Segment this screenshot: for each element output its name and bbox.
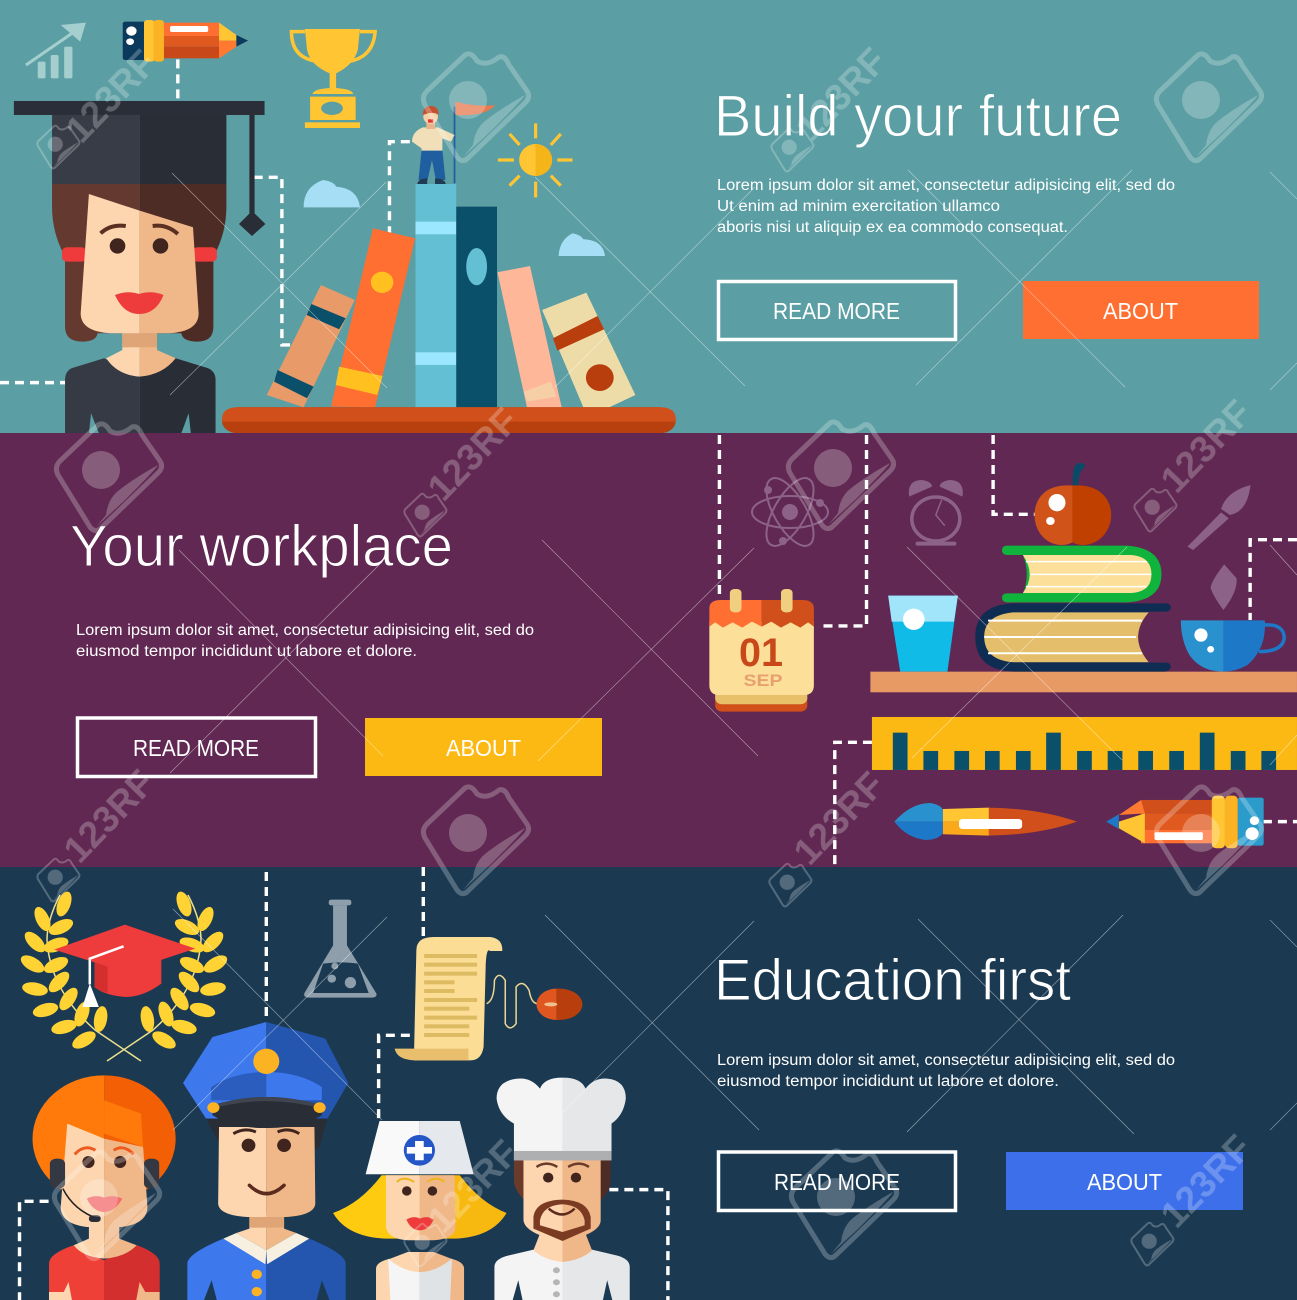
button: read more (718, 1152, 956, 1210)
icon: graduation cap red (54, 925, 195, 1007)
watermark overlay: 123RF (786, 764, 892, 873)
button: about: ABOUT (1087, 1169, 1162, 1195)
icon: green book (1002, 546, 1161, 602)
body text: Lorem ipsum dolor sit amet, consectetur adipisicing elit, sed do (717, 177, 1175, 194)
icon: laurel wreath (18, 890, 230, 1061)
heading: Your workplace (70, 514, 453, 579)
icon: navy book (975, 603, 1171, 672)
icon: trophy (291, 29, 375, 128)
watermark overlay: 123RF (788, 40, 894, 149)
calendar date: 01 (739, 631, 783, 675)
body text: aboris nisi ut aliquip ex ea commodo consequat. (717, 219, 1068, 236)
body text: eiusmod tempor incididunt ut labore et dolore. (717, 1073, 1059, 1090)
icon: glass of water (888, 596, 958, 672)
icon: growth chart (26, 23, 86, 78)
icon: cloud small (559, 233, 605, 256)
watermark overlay: 123RF (420, 400, 526, 509)
panel background teal (0, 0, 1297, 433)
body text (76, 622, 534, 660)
shelf (870, 672, 1297, 692)
figure: chef (494, 1078, 630, 1300)
watermark overlay: 123RF (56, 762, 162, 871)
watermark overlay: 123RF (420, 1132, 526, 1241)
body text (717, 177, 1175, 236)
icon: flask (304, 900, 377, 998)
figure: small man with flag (412, 102, 495, 184)
icon: scroll (395, 937, 502, 1060)
illustration: school supplies (709, 435, 1297, 867)
icon: sun (498, 123, 572, 197)
icon: paint brush (1187, 485, 1251, 550)
shelf books (222, 184, 676, 433)
watermark overlay: 123RF (1153, 392, 1259, 501)
icon: tea cup (1181, 620, 1284, 672)
panel: your workplace (0, 433, 1297, 867)
button: read more (718, 282, 956, 340)
panel: education first (0, 867, 1297, 1300)
illustration: graduate and books (0, 20, 676, 433)
icon: pencil (123, 20, 248, 62)
body text (717, 1052, 1175, 1090)
button: about (365, 718, 602, 776)
icon: atom (752, 471, 828, 553)
button: read more (78, 718, 316, 776)
panel: build your future (0, 0, 1297, 433)
icon: alarm clock (909, 480, 963, 546)
button: read more: READ MORE (133, 735, 259, 761)
illustration: professions (20, 867, 668, 1300)
figure: graduate woman (14, 101, 265, 433)
icon: pencil colored (1106, 796, 1264, 848)
button: about: ABOUT (1103, 298, 1178, 324)
heading: Education first (714, 948, 1071, 1013)
icon: ruler (872, 717, 1297, 770)
icon: calendar (709, 589, 814, 712)
icon: cloud (304, 180, 360, 207)
watermark overlay: 123RF (58, 42, 164, 151)
button: read more: READ MORE (774, 1169, 900, 1195)
icon: paint brush colored (894, 803, 1077, 840)
body text: Ut enim ad minim exercitation ullamco (717, 198, 1000, 215)
button: read more: READ MORE (773, 298, 900, 324)
figure: nurse (333, 1121, 507, 1300)
button: about (1023, 281, 1259, 339)
figure: call center operator (33, 1075, 176, 1300)
calendar date: SEP (744, 671, 782, 690)
button: about: ABOUT (446, 735, 521, 761)
panel background purple (0, 433, 1297, 867)
figure: police officer (183, 1022, 348, 1300)
icon: apple (1035, 463, 1111, 545)
panel background navy (0, 867, 1297, 1300)
icon: steam leaf (1211, 564, 1237, 610)
heading: Build your future (714, 84, 1122, 149)
icon: computer mouse (487, 975, 582, 1028)
body text: eiusmod tempor incididunt ut labore et dolore. (76, 643, 417, 660)
body text: Lorem ipsum dolor sit amet, consectetur adipisicing elit, sed do (717, 1052, 1175, 1069)
button: about (1006, 1152, 1243, 1210)
watermark overlay: 123RF (1153, 1127, 1259, 1236)
body text: Lorem ipsum dolor sit amet, consectetur adipisicing elit, sed do (76, 622, 534, 639)
